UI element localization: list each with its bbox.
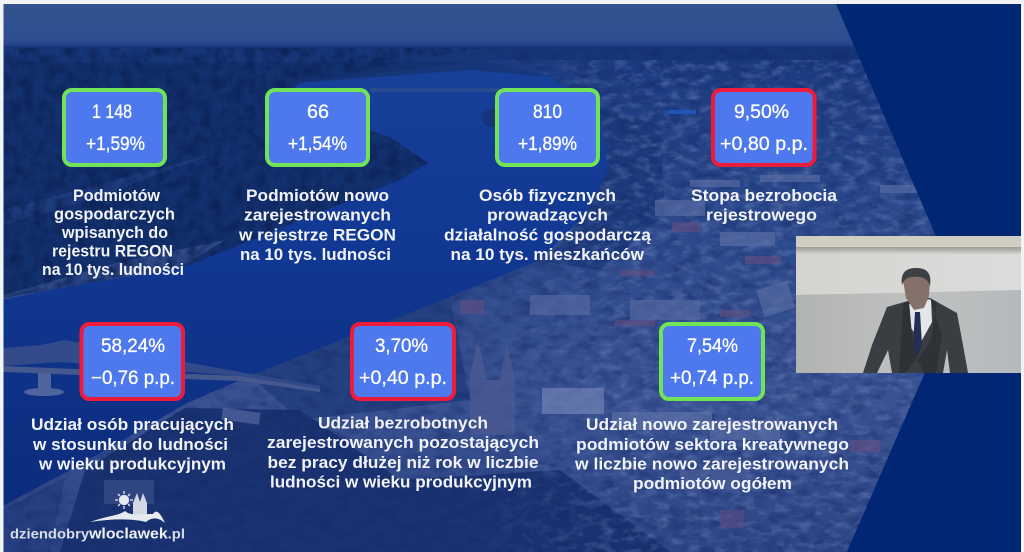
river [3,70,608,506]
description 5 [31,415,234,474]
stat card 6: 3,70% [375,336,428,357]
dark greenery east bank [545,110,665,270]
forest south-west [60,408,670,552]
mid bank [250,297,470,420]
stat card 2: 66 [307,102,329,123]
speaker video [796,236,1021,373]
upper wall [796,254,1021,295]
description 3: prowadzących [487,206,608,224]
description 7: podmiotów sektora kreatywnego [576,435,849,454]
icon: cathedral [133,493,147,519]
description 7: w liczbie nowo zarejestrowanych [574,454,849,474]
description 7 [574,415,849,493]
stat card 6: +0,40 p.p. [359,368,447,389]
description 2: zarejestrowanych [244,206,391,224]
description 1: gospodarczych [54,204,175,224]
description 1: na 10 tys. ludności [42,260,184,279]
stat card 1 [64,90,165,165]
sky [3,4,903,48]
small island [482,109,495,127]
description 2: w rejestrze REGON [238,226,396,244]
cathedral towers [470,340,515,435]
description 2: Podmiotów nowo [246,186,389,205]
description 4 [691,186,838,224]
description 1 [42,186,184,279]
description 6: ludności w wieku produkcyjnym [270,472,532,492]
icon: sun [115,491,133,509]
stat card 2: +1,54% [288,134,347,155]
description 3 [444,186,652,264]
description 3: na 10 tys. mieszkańców [450,245,645,264]
description 2 [238,186,396,264]
far land [4,46,860,82]
description 6 [267,414,539,492]
sand bank of the island [3,240,225,300]
description 4: rejestrowego [706,206,817,224]
description 6: zarejestrowanych pozostających [267,433,539,452]
logo: dziendobrywloclawek.pl [10,491,185,542]
bridge [3,340,320,396]
description 5: w stosunku do ludności [32,435,228,454]
description 6: bez pracy dłużej niż rok w liczbie [268,453,538,472]
icon: bridge waves [90,511,165,523]
description 1: wpisanych do [61,223,168,242]
stat card 1: 1 148 [92,102,132,123]
stat card 5: −0,76 p.p. [91,368,175,389]
west bank forest [3,62,470,298]
stat card 1: +1,59% [86,134,145,155]
description 3: Osób fizycznych [479,186,616,205]
speaker [863,268,968,373]
description 6: Udział bezrobotnych [318,414,488,432]
description 7: podmiotów ogółem [633,474,792,493]
stat card 7 [661,324,763,399]
stat card 2 [267,90,368,165]
description 2: na 10 tys. ludności [240,245,391,264]
water pool [668,110,696,114]
stat card 4: +0,80 p.p. [720,134,808,155]
description 4: Stopa bezrobocia [691,186,838,205]
stat card 5: 58,24% [101,336,165,357]
stat card 4: 9,50% [734,102,789,123]
stat card 6 [352,324,454,399]
red roofs [460,222,880,528]
top ledge [796,236,1021,247]
stat card 4 [713,90,814,165]
description 7: Udział nowo zarejestrowanych [586,415,838,434]
stat card 3: +1,89% [518,134,577,155]
panel: right navy chevron [836,4,1021,552]
description 5: Udział osób pracujących [31,415,234,434]
road bridge far [370,88,500,92]
description 3: działalność gospodarczą [444,226,652,244]
description 1: rejestru REGON [52,242,173,260]
wordmark: dziendobry wloclawek .pl [10,526,185,542]
buildings [104,175,925,504]
stat card 7: +0,74 p.p. [670,368,754,389]
texture forest [4,48,479,298]
stat card 7: 7,54% [687,336,738,357]
description 1: Podmiotów [73,186,161,205]
stat card 3 [497,90,598,165]
stat card 3: 810 [533,102,562,123]
stat card 5 [82,324,183,399]
description 5: w wieku produkcyjnym [38,454,226,474]
